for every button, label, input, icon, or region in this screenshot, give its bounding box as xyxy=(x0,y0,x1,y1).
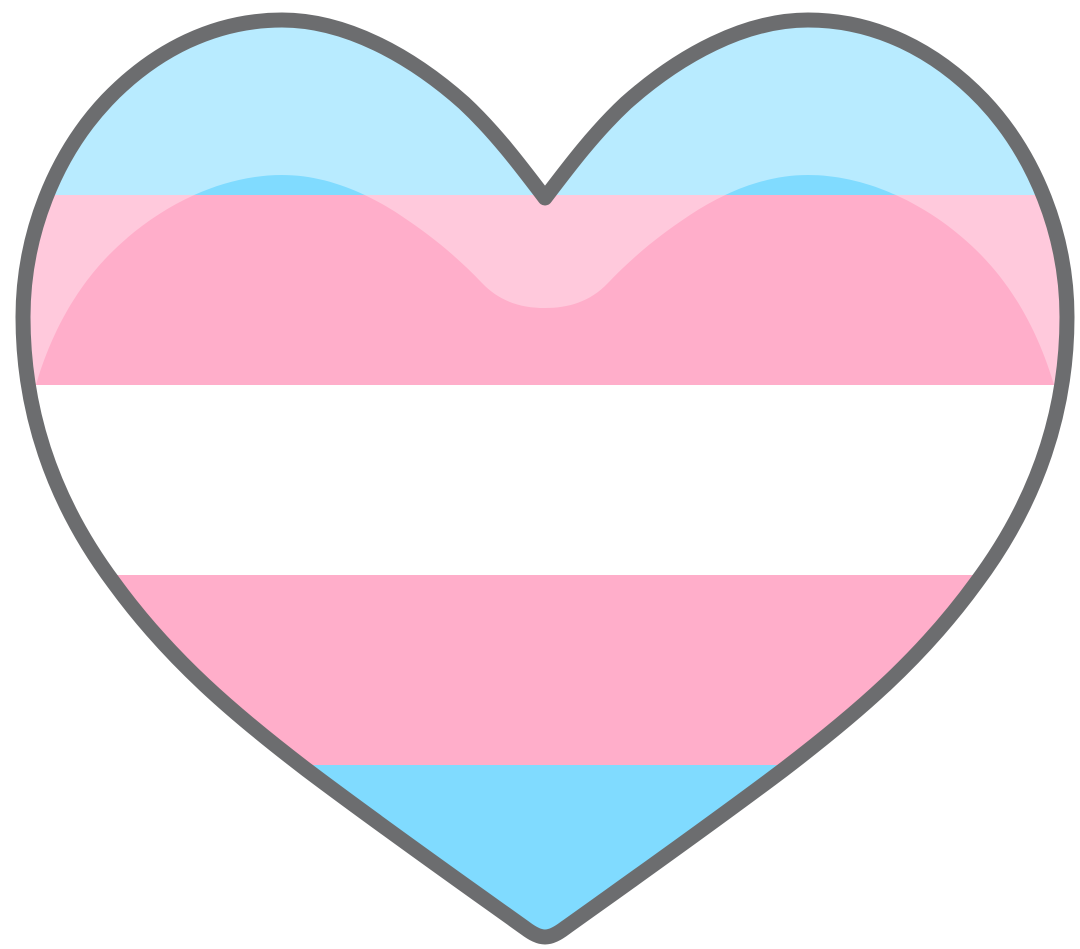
stripe: bottom blue xyxy=(313,765,777,930)
stripe: upper pink xyxy=(0,195,1080,385)
stripe: white xyxy=(0,385,1080,575)
stripe: lower pink xyxy=(118,575,972,765)
stripe: top blue xyxy=(55,28,1035,195)
highlight: glossy overlay on blue stripe xyxy=(55,28,1035,195)
highlight: glossy overlay on pink stripe xyxy=(30,195,1060,384)
